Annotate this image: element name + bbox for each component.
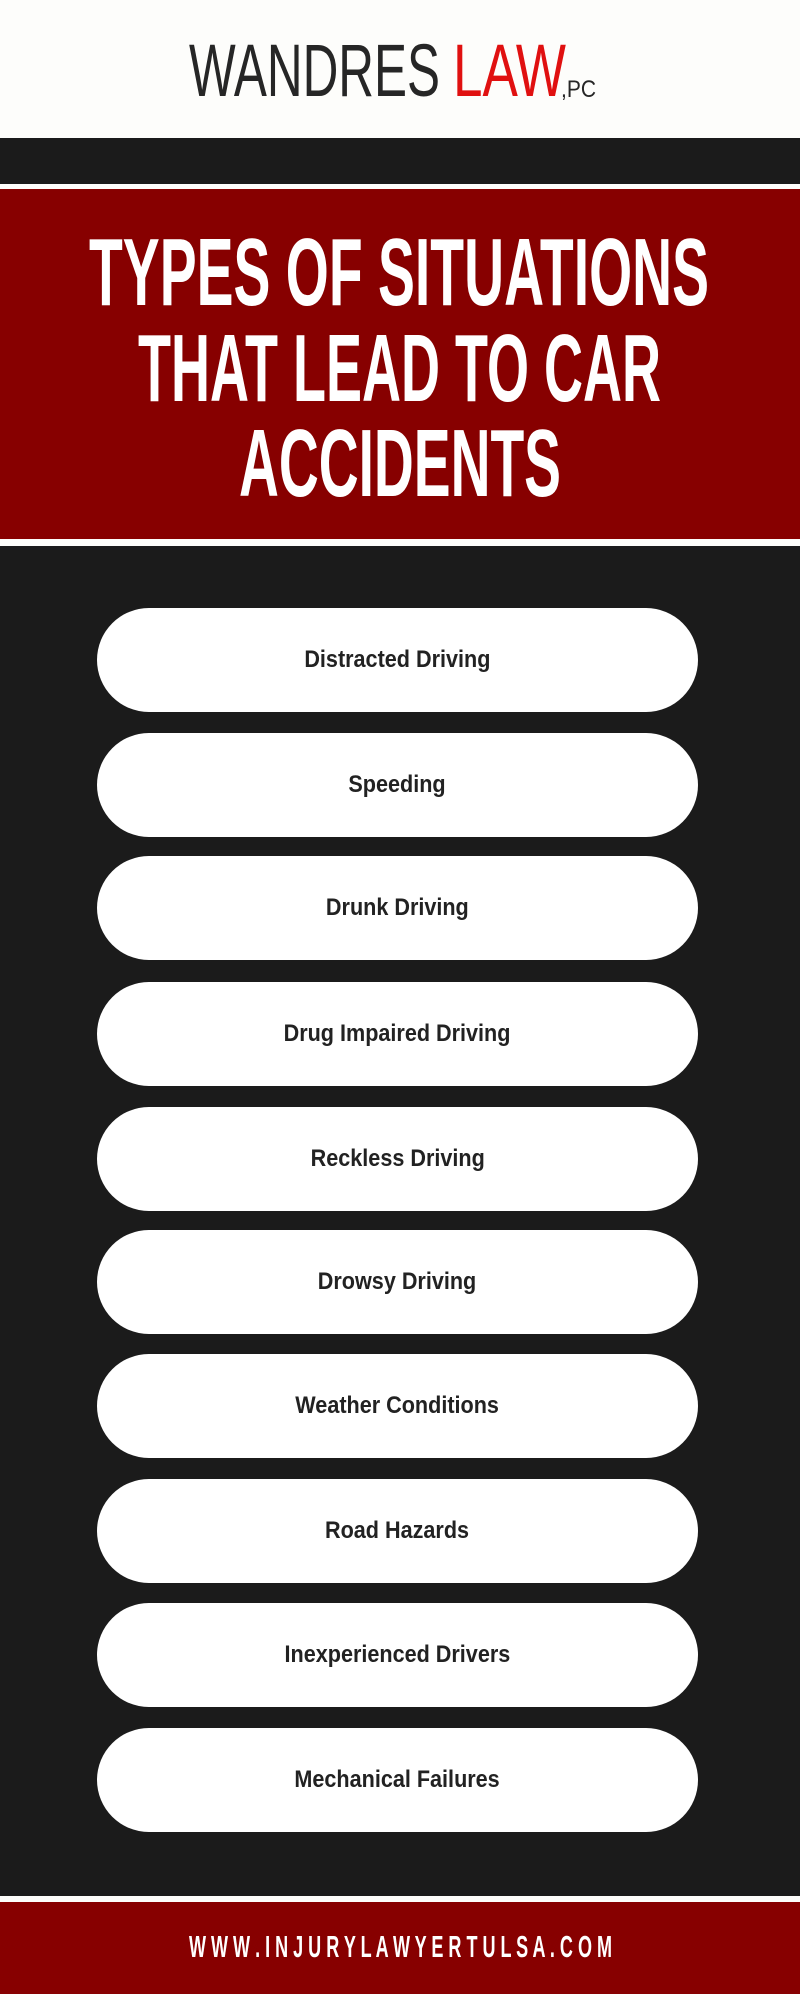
header logo: WANDRES — [189, 29, 440, 112]
pill: road hazards — [97, 1479, 698, 1583]
pill: distracted driving: Distracted Driving — [304, 646, 491, 673]
pill: weather conditions — [97, 1354, 698, 1458]
pill: drunk driving: Drunk Driving — [326, 894, 469, 921]
title text: ACCIDENTS — [239, 410, 561, 517]
title banner — [0, 189, 800, 539]
header logo: LAW — [453, 29, 566, 112]
pill: mechanical failures — [97, 1728, 698, 1832]
pill: drowsy driving — [97, 1230, 698, 1334]
pill: reckless driving — [97, 1107, 698, 1211]
pill: drowsy driving: Drowsy Driving — [318, 1268, 477, 1295]
pill: drunk driving — [97, 856, 698, 960]
pill: inexperienced drivers: Inexperienced Drivers — [285, 1641, 510, 1668]
pill: reckless driving: Reckless Driving — [310, 1145, 485, 1172]
pill: drug impaired driving — [97, 982, 698, 1086]
pill: road hazards: Road Hazards — [325, 1517, 470, 1544]
pill: speeding: Speeding — [349, 771, 446, 798]
pill: distracted driving — [97, 608, 698, 712]
header logo — [0, 0, 800, 138]
list panel — [0, 546, 800, 1896]
title text — [89, 219, 709, 517]
pill: mechanical failures: Mechanical Failures — [295, 1766, 500, 1793]
pill: drug impaired driving: Drug Impaired Driving — [284, 1020, 511, 1047]
footer — [0, 1902, 800, 1994]
pill: weather conditions: Weather Conditions — [296, 1392, 499, 1419]
header logo: ,PC — [561, 76, 596, 103]
pill: inexperienced drivers — [97, 1603, 698, 1707]
pill: speeding — [97, 733, 698, 837]
